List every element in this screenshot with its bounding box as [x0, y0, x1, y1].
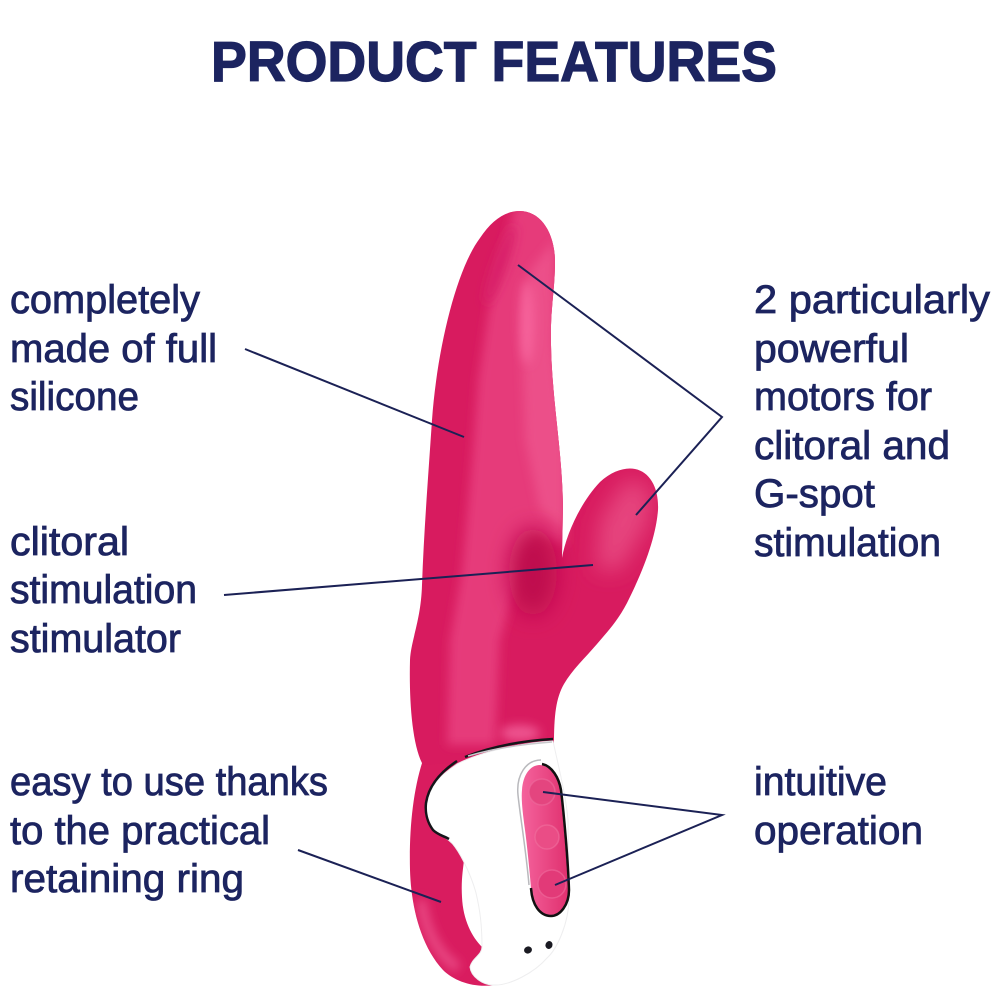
text block: intuitive operation: [754, 760, 923, 853]
white handle: [426, 741, 569, 985]
silver band: [468, 742, 552, 756]
leader lines: motors: [518, 265, 722, 515]
text block: motors: [754, 278, 990, 565]
text block: full silicone: silicone: [10, 375, 139, 419]
text block: retaining ring: retaining ring: [10, 857, 244, 901]
leader line: retaining ring: [298, 850, 441, 902]
text block: motors: stimulation: [754, 521, 941, 565]
button: bottom: [538, 870, 566, 898]
leader line: silicone: [245, 349, 464, 437]
handle dark rim: [426, 739, 553, 839]
shaft and clitoral arm: [410, 211, 658, 765]
text block: clitoral stimulation: clitoral: [10, 520, 129, 564]
body shading: [447, 205, 650, 745]
control panel buttons area: [522, 765, 568, 915]
text block: intuitive operation: operation: [754, 809, 923, 853]
leader lines: operation: [543, 792, 722, 885]
text block: motors: 2 particularly: [754, 278, 990, 322]
product illustration: [410, 205, 658, 986]
text block: full silicone: [10, 278, 217, 419]
text block: retaining ring: to the practical: [10, 809, 270, 853]
text block: motors: powerful: [754, 327, 909, 371]
text block: clitoral stimulation: stimulator: [10, 617, 181, 661]
title: PRODUCT FEATURES: [211, 30, 777, 94]
indicator dots: [523, 940, 554, 955]
text block: motors: motors for: [754, 375, 932, 419]
text block: full silicone: completely: [10, 278, 200, 322]
button: top: [529, 779, 555, 805]
text block: retaining ring: easy to use thanks: [10, 760, 328, 804]
ring highlight: [421, 900, 458, 968]
text block: intuitive operation: intuitive: [754, 760, 887, 804]
text block: motors: clitoral and: [754, 424, 950, 468]
retaining ring: [410, 745, 500, 986]
control panel black frame: [531, 764, 569, 916]
text block: full silicone: made of full: [10, 327, 217, 371]
text block: clitoral stimulation: [10, 520, 197, 661]
leader line: clitoral stimulator: [224, 565, 593, 595]
text block: clitoral stimulation: stimulation: [10, 568, 197, 612]
text block: motors: G-spot: [754, 472, 875, 516]
button: middle: [535, 825, 559, 849]
control panel silver edge: [518, 760, 541, 885]
text block: retaining ring: [10, 760, 328, 901]
